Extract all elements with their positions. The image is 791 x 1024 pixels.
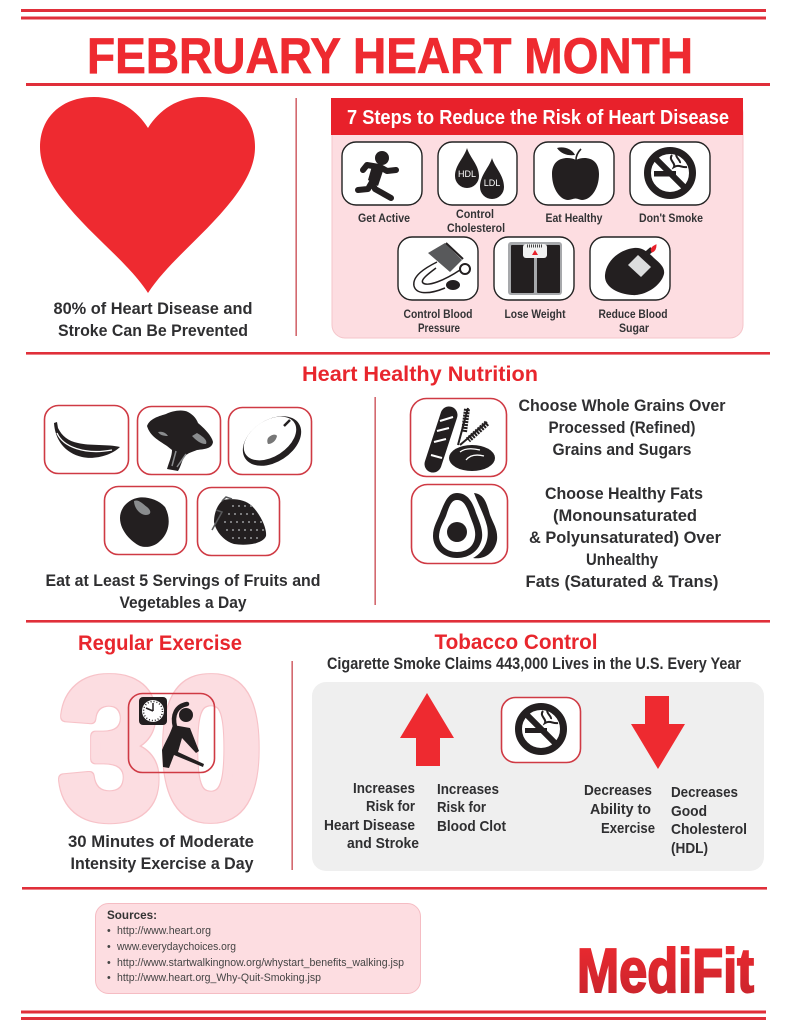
fats text: Choose Healthy Fats: [545, 485, 703, 503]
panel: sources: •: [107, 957, 111, 969]
text: decreases exercise ability: Ability to: [590, 801, 651, 818]
icon: eat healthy: Eat Healthy: [546, 213, 603, 225]
text: increases heart risk: [324, 780, 419, 852]
text: increases clot risk: Risk for: [437, 799, 486, 816]
icon: exercise box: [128, 694, 214, 772]
panel: sources: http://www.startwalkingnow.org/whystart_benefits_walking.jsp: [117, 957, 404, 969]
text: increases heart risk: and Stroke: [347, 835, 419, 852]
panel: grains: [410, 397, 726, 591]
icon: control cholesterol: HDL: [458, 169, 476, 179]
icon: reduce blood sugar: Reduce Blood: [598, 309, 668, 321]
text: decreases exercise ability: Exercise: [601, 820, 655, 837]
icon: no smoking: [502, 698, 580, 762]
panel: fruits and vegetables: [44, 406, 320, 612]
fruits caption: [46, 572, 320, 612]
icon: don't smoke: [630, 142, 710, 225]
text: decreases good cholesterol: (HDL): [671, 840, 708, 857]
steps header: [331, 98, 743, 135]
icon: strawberry: [198, 488, 280, 556]
icon: control blood pressure: [398, 237, 478, 335]
panel: sources: Sources:: [107, 910, 157, 922]
panel: sources: http://www.heart.org: [117, 925, 211, 937]
tobacco subheading: Cigarette Smoke Claims 443,000 Lives in the U.S. Every Year: [327, 655, 742, 673]
icon: large heart: [40, 97, 255, 293]
icon: eat healthy: [534, 142, 614, 225]
text: increases clot risk: Increases: [437, 781, 499, 798]
icon: control blood pressure: Pressure: [418, 323, 460, 335]
text: increases clot risk: Blood Clot: [437, 818, 506, 835]
panel: sources: [96, 904, 420, 994]
text: increases heart risk: Risk for: [366, 798, 415, 815]
big number 30: 30: [60, 639, 262, 858]
panel: tobacco control: [312, 630, 764, 871]
fats text: & Polyunsaturated) Over: [529, 529, 722, 547]
heart statistic text: Stroke Can Be Prevented: [58, 322, 248, 340]
fruits caption: Eat at Least 5 Servings of Fruits and: [46, 572, 320, 590]
panel: sources: •: [107, 925, 111, 937]
grains text: Processed (Refined): [548, 419, 696, 437]
fats text: [526, 485, 722, 591]
panel: sources: http://www.heart.org_Why-Quit-Smoking.jsp: [117, 972, 321, 984]
fats text: Unhealthy: [586, 551, 659, 569]
heart statistic text: 80% of Heart Disease and: [54, 300, 252, 318]
grains text: Grains and Sugars: [552, 441, 692, 459]
text: increases clot risk: [437, 781, 506, 835]
text: increases heart risk: Heart Disease: [324, 817, 415, 834]
icon: reduce blood sugar: Sugar: [619, 323, 649, 335]
title: FEBRUARY HEART MONTH: [87, 28, 693, 84]
icon: bread and wheat: [410, 398, 506, 476]
exercise caption: Intensity Exercise a Day: [70, 855, 254, 873]
panel: sources: •: [107, 972, 111, 984]
icon: pepper: [104, 486, 186, 554]
text: increases heart risk: Increases: [353, 780, 415, 797]
heading: tobacco control: Tobacco Control: [434, 630, 598, 654]
heading: heart healthy nutrition: Heart Healthy Nutrition: [302, 362, 538, 386]
panel: 7 steps: [331, 98, 743, 338]
fats text: (Monounsaturated: [553, 507, 697, 525]
panel: regular exercise: [60, 631, 262, 873]
steps header: 7 Steps to Reduce the Risk of Heart Disease: [347, 107, 729, 129]
grains text: [518, 397, 726, 459]
label: Get Active: [358, 213, 410, 225]
panel: heart statistic: [40, 97, 255, 340]
text: decreases good cholesterol: Decreases: [671, 784, 738, 801]
arrow: down: [631, 696, 685, 769]
icon: lose weight: Lose Weight: [504, 309, 566, 321]
panel: sources: •: [107, 941, 111, 953]
icon: apple half: [228, 406, 312, 476]
text: decreases exercise ability: [584, 782, 655, 837]
icon: control blood pressure: Control Blood: [404, 309, 472, 321]
text: decreases exercise ability: Decreases: [584, 782, 652, 799]
heading: regular exercise: Regular Exercise: [78, 631, 242, 655]
icon: control cholesterol: Control: [456, 209, 494, 221]
logo: MediFit: MediFit: [577, 937, 754, 1006]
panel: sources: www.everydaychoices.org: [116, 941, 236, 953]
icon: control cholesterol: LDL: [484, 178, 500, 188]
icon: lose weight: [494, 237, 574, 321]
exercise caption: 30 Minutes of Moderate: [68, 833, 254, 851]
icon: control cholesterol: [438, 142, 517, 235]
icon: control cholesterol: Cholesterol: [447, 223, 505, 235]
fruits caption: Vegetables a Day: [120, 594, 247, 612]
exercise caption: [68, 833, 254, 873]
icon: don't smoke: Don't Smoke: [639, 213, 703, 225]
text: decreases good cholesterol: Cholesterol: [671, 821, 747, 838]
icon: avocado: [412, 484, 508, 564]
grains text: Choose Whole Grains Over: [518, 397, 726, 415]
icon: banana: [44, 406, 128, 474]
arrow: up: [400, 693, 454, 766]
text: decreases good cholesterol: Good: [671, 803, 707, 820]
icon: broccoli: [138, 406, 220, 474]
fats text: Fats (Saturated & Trans): [526, 573, 718, 591]
heart statistic text: [54, 300, 252, 340]
text: decreases good cholesterol: [671, 784, 747, 857]
icon: reduce blood sugar: [590, 237, 670, 335]
icon: get active: [342, 142, 422, 225]
